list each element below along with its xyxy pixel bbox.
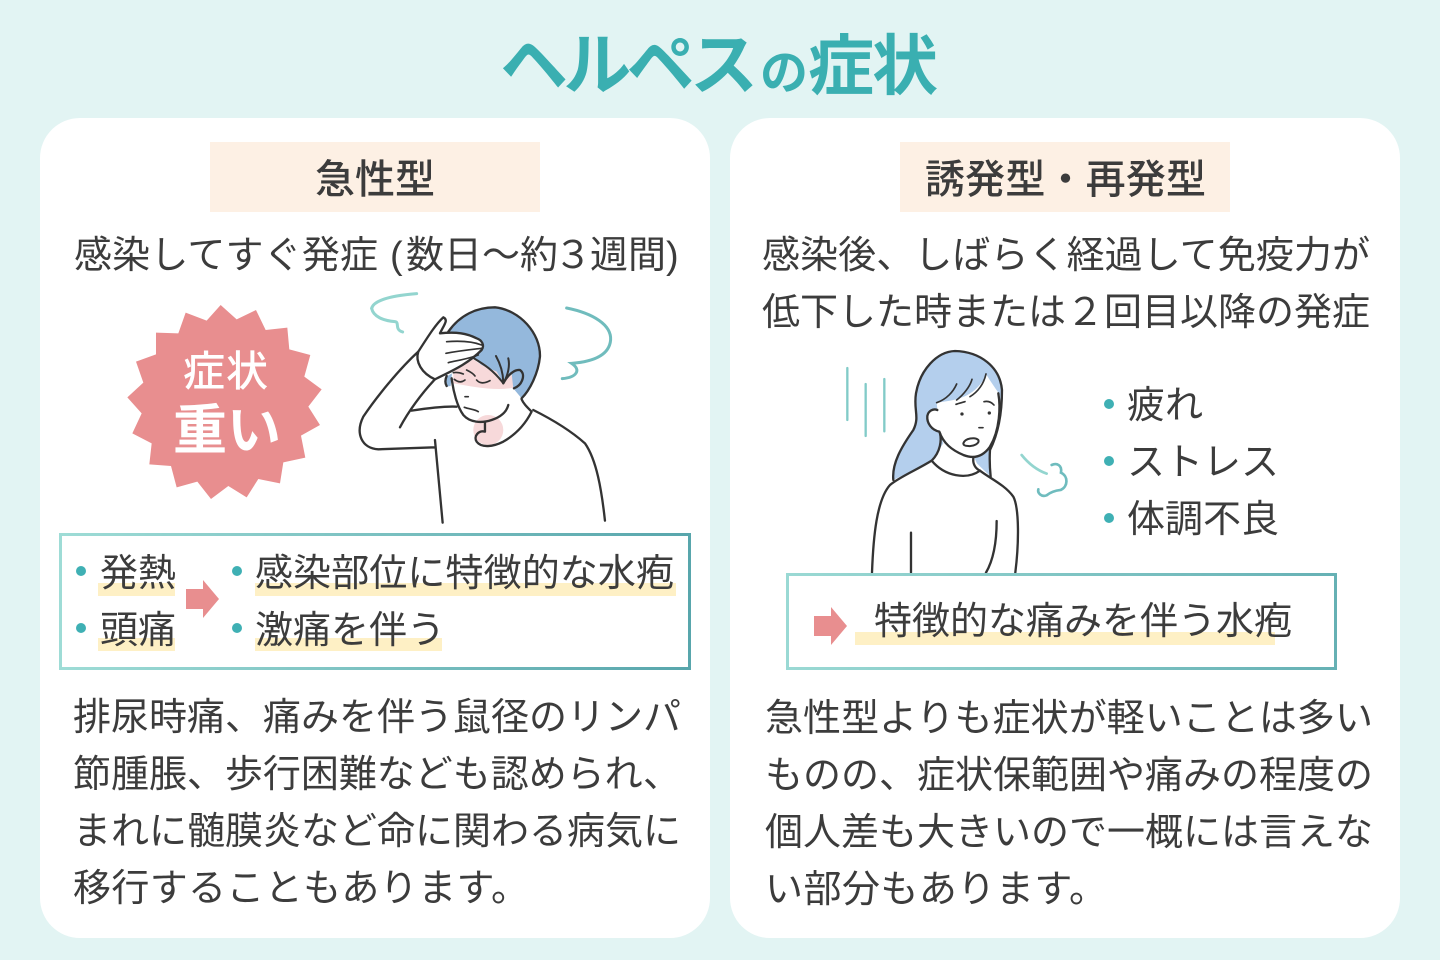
symptom list: 頭痛 (100, 610, 176, 652)
symptom list: triggers (1104, 385, 1279, 541)
heading: acute type (210, 142, 540, 212)
text block: acute onset (74, 235, 679, 277)
symptom list (100, 553, 674, 652)
badge: severe symptoms: 症状 (183, 348, 268, 395)
text block: recurrent description: い部分もあります。 (765, 869, 1107, 911)
text block: acute description (73, 697, 681, 910)
text block: acute onset: ) (666, 235, 679, 277)
text block: acute description: 節腫脹、歩行困難なども認められ、 (73, 754, 681, 796)
title: ヘルペス (500, 28, 758, 104)
text block: acute onset: 週間 (590, 235, 666, 277)
heading: recurrent type: 誘発型・再発型 (925, 158, 1206, 202)
text block: recurrent onset (762, 235, 1370, 334)
text block: acute onset: ( (390, 235, 403, 277)
illustration: man with fever holding forehead (360, 294, 611, 523)
text block: acute onset: ３ (554, 235, 592, 277)
text block: acute onset: 数日〜約 (406, 235, 558, 277)
title (500, 28, 938, 104)
panel: recurrent type (730, 118, 1400, 938)
badge: severe symptoms: 重い (173, 401, 281, 461)
text block: acute description: まれに髄膜炎など命に関わる病気に (73, 811, 681, 853)
text block: recurrent onset: 低下した時または２回目以降の発症 (762, 292, 1370, 334)
symptom list: 激痛を伴う (255, 610, 445, 652)
symptom list: 発熱 (100, 553, 176, 595)
callout: characteristic blisters (788, 574, 1336, 668)
list text: ストレス (1127, 442, 1279, 484)
panel: acute type (40, 118, 710, 938)
text block: recurrent description: 個人差も大きいので一概には言えな (765, 812, 1373, 854)
text block: recurrent description (765, 698, 1373, 911)
list text: 疲れ (1127, 385, 1203, 427)
text block: acute description: 排尿時痛、痛みを伴う鼠径のリンパ (73, 697, 681, 739)
bullets (76, 566, 242, 633)
badge: severe symptoms (127, 305, 322, 499)
title: の (760, 47, 808, 100)
arrow (814, 607, 847, 645)
text block: recurrent description: 急性型よりも症状が軽いことは多い (765, 698, 1373, 740)
text block: recurrent description: ものの、症状保範囲や痛みの程度の (765, 755, 1373, 797)
illustration: tired woman (847, 351, 1066, 573)
arrow (186, 580, 219, 618)
title: 症状 (808, 29, 938, 103)
callout text: 特徴的な痛みを伴う水疱 (874, 601, 1292, 643)
highlights (98, 583, 676, 651)
heading: acute type: 急性型 (315, 158, 435, 202)
highlight (855, 632, 1275, 645)
symptom list: 感染部位に特徴的な水疱 (255, 553, 674, 595)
text block: recurrent onset: 感染後、しばらく経過して免疫力が (762, 235, 1370, 277)
heading: recurrent type (900, 142, 1230, 212)
callout: acute symptoms (60, 534, 690, 668)
bullets (1104, 399, 1114, 523)
text block: acute description: 移行することもあります。 (73, 868, 529, 910)
list text: 体調不良 (1127, 499, 1279, 541)
list text (1127, 385, 1279, 541)
text block: acute onset: 感染してすぐ発症 (74, 235, 378, 277)
